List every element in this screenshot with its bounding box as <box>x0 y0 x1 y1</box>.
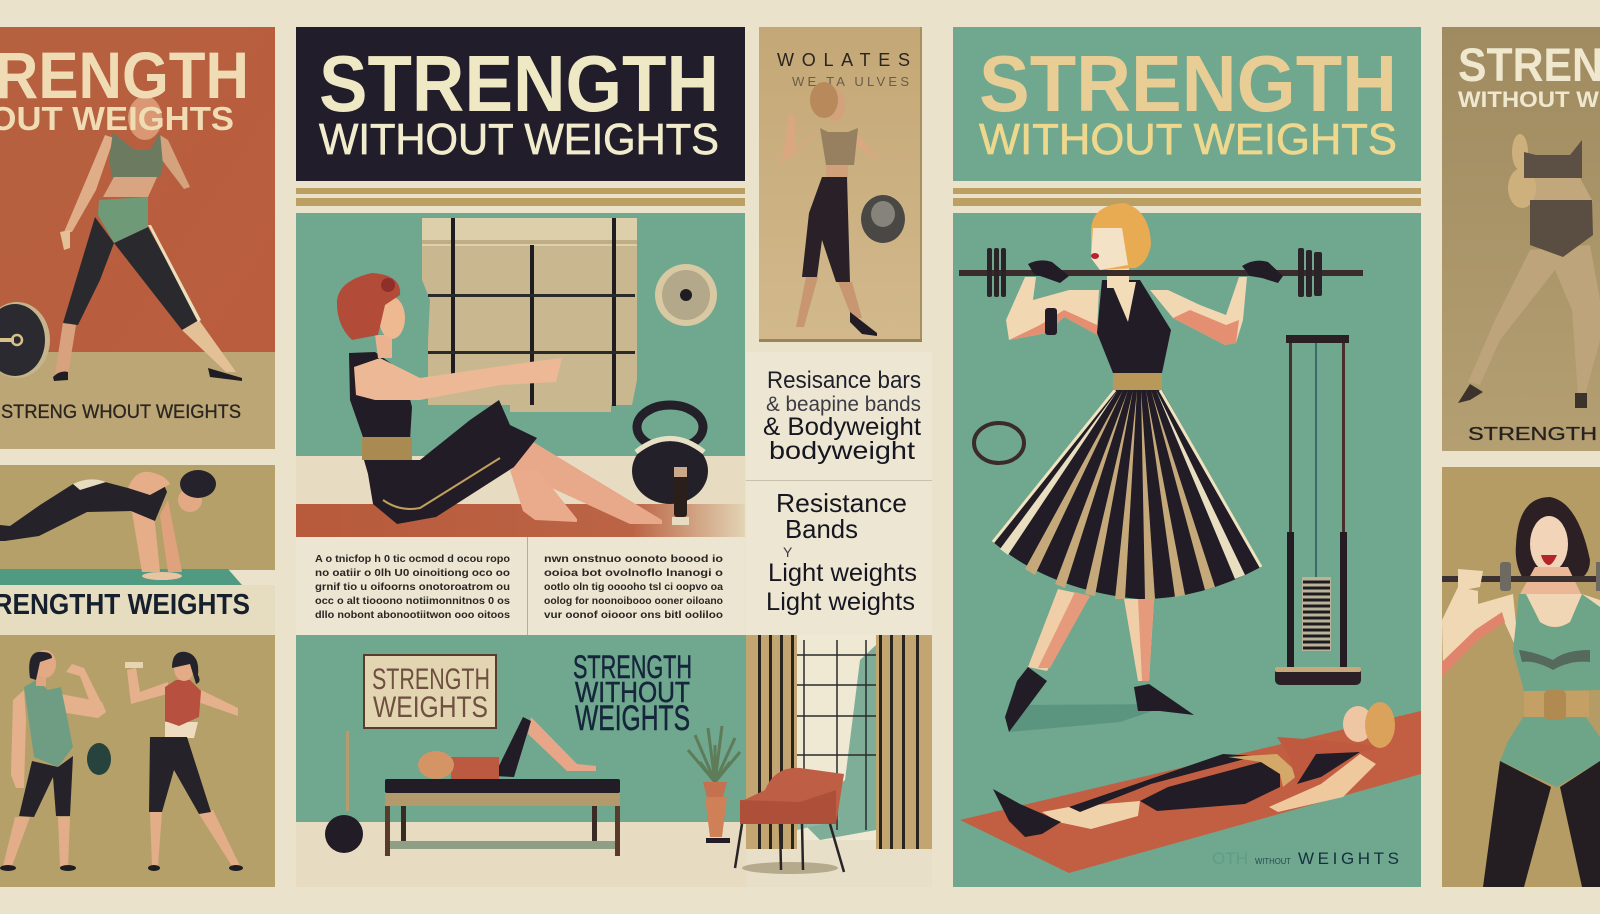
caption: weights: WITHOUT <box>1255 857 1291 866</box>
text column left: grnif tio u oifoorns onotoroatrom ou <box>315 582 510 593</box>
heading: strength: STRENGTH <box>319 39 719 128</box>
panel: seated woman scene <box>296 213 745 537</box>
panel: red poster top left <box>0 27 275 449</box>
window view <box>797 635 876 840</box>
exercise mat <box>960 711 1421 873</box>
label: bands: Bands <box>785 514 858 544</box>
figure: faded woman <box>1458 134 1600 408</box>
panel: bench room <box>296 635 746 887</box>
figure: woman flexing <box>125 652 243 871</box>
figure: woman lying on mat <box>993 702 1395 837</box>
caption: STRENG WHOUT WEIGHTS <box>1 402 241 423</box>
wall disc <box>655 264 717 326</box>
panel: body copy <box>296 537 745 635</box>
caption: weights <box>1212 849 1399 868</box>
framed sign: WEIGHTS <box>373 691 488 724</box>
shadow <box>1009 704 1173 732</box>
text column left: no oatiir o 0lh U0 oinoitiong oco oo <box>315 568 510 579</box>
panel: equipment text <box>746 352 932 635</box>
kettlebell and bottle <box>632 405 708 525</box>
torso <box>1097 280 1171 390</box>
icon: weight plate <box>0 302 50 378</box>
text column right: ootlo oln tig ooooho tsl ci oopvo oa <box>544 582 723 593</box>
label: resistance: Resistance <box>776 488 907 518</box>
panel: push-up poster <box>0 465 275 635</box>
stick and ball <box>325 731 363 853</box>
text column right <box>544 554 723 621</box>
figure: smiling woman <box>1442 497 1600 887</box>
gloved hands <box>1028 260 1283 283</box>
label: light weights repeat: Light weights <box>766 588 915 616</box>
label: stray y: Y <box>783 544 793 560</box>
framed sign <box>364 655 496 728</box>
armchair <box>735 768 844 874</box>
decorative stripes left <box>296 188 745 206</box>
text column right: vur oonof oiooor ons bitl ooliloo <box>544 610 723 621</box>
caption: weights: WEIGHTS <box>1298 849 1399 868</box>
panel: couple poster <box>0 635 275 887</box>
panel: ghost poster right <box>1442 27 1600 451</box>
text column left: A o tnicfop h 0 tic ocmod d ocou ropo <box>315 554 510 565</box>
label: bodyweight: & Bodyweight <box>763 413 921 441</box>
heading: wolates: WOLATES <box>777 50 910 70</box>
panel: narrow poster <box>759 27 922 342</box>
panel: center poster <box>953 27 1421 887</box>
figure: standing woman <box>53 96 242 381</box>
heading block on wall: WEIGHTS <box>575 699 690 738</box>
head <box>1091 203 1151 288</box>
legs and shoes <box>1005 589 1194 732</box>
window with blinds <box>422 218 637 412</box>
label: bodyweight repeat: bodyweight <box>769 437 915 465</box>
text column left: dllo nobont abonootiitwon ooo oitoos <box>315 610 510 621</box>
label: light weights: Light weights <box>768 559 917 587</box>
icon: small weight <box>87 743 111 775</box>
figure: woman in plank <box>0 470 216 580</box>
framed sign: STRENGTH <box>372 663 490 696</box>
heading block on wall: STRENGTH <box>573 649 692 685</box>
label: resistance bars: Resisance bars <box>767 367 921 394</box>
icon: ring <box>974 423 1024 463</box>
text column right: ooioa bot ovolnoflo lnanogi o <box>544 568 723 579</box>
panel: smiling woman poster <box>1442 467 1600 887</box>
heading block on wall: WITHOUT <box>575 677 690 709</box>
bench <box>385 779 620 856</box>
panel: dark title banner <box>296 27 745 181</box>
text column right: oolog for noonoibooo ooner oiloano <box>544 596 723 607</box>
heading block on wall <box>573 649 692 738</box>
plant <box>688 726 740 843</box>
resistance machine <box>1275 335 1361 685</box>
figure: seated woman <box>337 273 662 524</box>
heading: without weights: WITHOUT WEIGHTS <box>979 115 1397 164</box>
barbell <box>959 248 1363 297</box>
panel: curtain room <box>735 635 932 887</box>
caption: weights: OTH <box>1212 849 1248 868</box>
heading: without weights: WITHOUT WEIGHTS <box>319 115 719 164</box>
figure: woman on bench <box>418 717 596 779</box>
icon: round device <box>861 195 905 243</box>
figure: man flexing <box>0 650 106 871</box>
label: beapine bands: & beapine bands <box>766 393 921 416</box>
text column left <box>315 554 510 621</box>
heading: strength: STRENGTH <box>979 39 1397 128</box>
figure: woman standing <box>781 82 877 336</box>
subheading: WE TA ULVES <box>792 74 909 89</box>
arms <box>1006 277 1247 345</box>
figure: woman with barbell <box>959 203 1363 732</box>
text column left: occ o alt tiooono notiimonnitnos 0 os <box>315 596 510 607</box>
skirt <box>993 390 1261 599</box>
curtains <box>746 635 932 849</box>
text column right: nwn onstnuo oonoto boood io <box>544 554 723 565</box>
